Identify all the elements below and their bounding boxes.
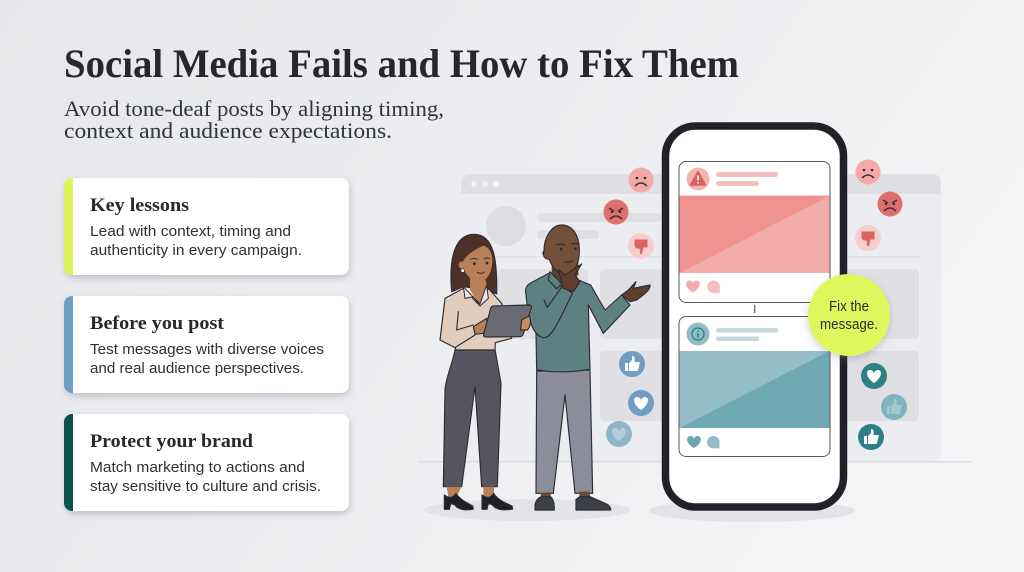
title: Social Media Fails and How to Fix Them xyxy=(64,41,739,86)
icon: angry face left xyxy=(604,200,628,224)
icon: heart blue xyxy=(628,390,654,416)
icon: angry face right xyxy=(878,192,902,216)
panel: key lessons xyxy=(64,178,349,275)
callout: fix the message xyxy=(808,274,890,356)
icon: heart faded xyxy=(606,421,632,447)
illustration: man thinking xyxy=(525,225,650,510)
post card: fixed xyxy=(679,316,830,456)
icon: thumbs up blue xyxy=(619,351,645,377)
panel: before you post: Test messages with diverse voices xyxy=(90,342,324,358)
subtitle: Avoid tone-deaf posts by aligning timing, xyxy=(64,96,444,121)
icon: sad face left xyxy=(628,168,654,192)
ground shadows xyxy=(424,499,855,522)
subtitle: context and audience expectations. xyxy=(64,118,392,143)
illustration: woman with tablet xyxy=(440,234,531,510)
panel: protect your brand xyxy=(64,414,349,511)
phone xyxy=(666,126,844,507)
post card: problem xyxy=(679,162,830,302)
subtitle xyxy=(64,96,444,143)
panel: key lessons: Key lessons xyxy=(90,195,189,216)
callout: fix the message: Fix the xyxy=(829,299,869,315)
callout: fix the message: message. xyxy=(820,317,878,333)
panel: before you post: and real audience perspectives. xyxy=(90,361,304,377)
panel: key lessons: Lead with context, timing and xyxy=(90,224,291,240)
panel: before you post: Before you post xyxy=(90,313,225,334)
panel: protect your brand: Protect your brand xyxy=(90,431,253,452)
icon: thumbs down right xyxy=(855,225,881,251)
panel: before you post xyxy=(64,296,349,393)
icon: sad face right xyxy=(856,160,880,184)
connector xyxy=(754,305,755,313)
browser window backdrop xyxy=(418,174,972,462)
panel: protect your brand: Match marketing to actions and xyxy=(90,460,305,476)
panel: protect your brand: stay sensitive to culture and crisis. xyxy=(90,479,321,495)
icon: thumbs up faded xyxy=(881,394,907,420)
icon: thumbs down left xyxy=(628,233,654,259)
icon: heart teal xyxy=(861,363,887,389)
panel: key lessons: authenticity in every campaign. xyxy=(90,243,302,259)
icon: thumbs up teal xyxy=(858,424,884,450)
